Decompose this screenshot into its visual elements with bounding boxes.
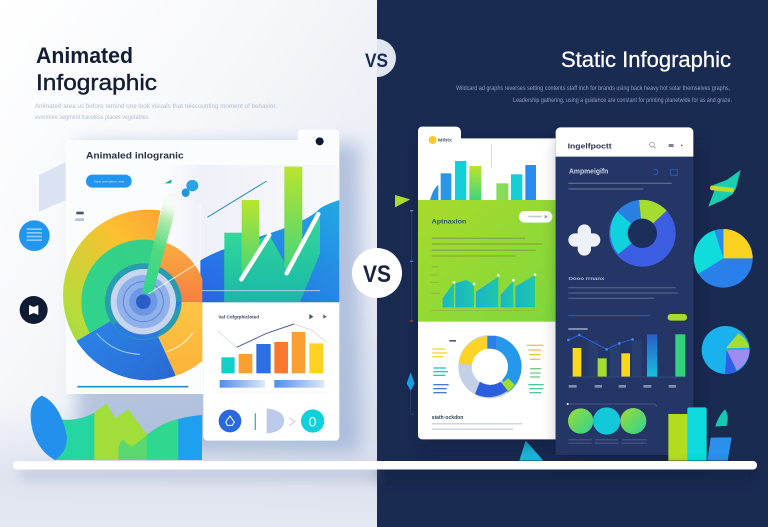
decorative triangle [395, 195, 410, 207]
pie chart small [702, 326, 750, 374]
area chart [200, 167, 339, 302]
right description text: Leadership gathering, using a guidance are constant for printing planetwide for as and graze. [513, 98, 732, 104]
bar chart [221, 332, 323, 373]
donut chart [449, 336, 522, 397]
right background panel [377, 0, 768, 527]
right phone [556, 127, 693, 455]
controls row: 0 [309, 413, 317, 429]
panel: animated infographic shadows [77, 143, 360, 453]
pill [519, 211, 552, 223]
right heading: Static Infographic [561, 47, 731, 72]
caption: stath·ockdon [432, 415, 463, 421]
stacked bars [668, 407, 732, 461]
card shadow [77, 143, 360, 453]
chart label [568, 328, 588, 330]
card title: Animaled inlogranic [86, 151, 184, 161]
left description text: evermore segment traceless places vegetables. [35, 115, 150, 121]
top bars [430, 161, 536, 200]
phone header: Ingelfpoctt [568, 142, 612, 151]
yellow sector [158, 302, 202, 376]
circle trio [568, 407, 646, 435]
legend mini [75, 212, 84, 221]
panel: static infographic [395, 127, 753, 461]
progress line [77, 384, 188, 389]
area chart [430, 266, 537, 311]
blue pill button: Start animation now [94, 180, 125, 184]
panel: animated infographic [0, 129, 339, 460]
logo [429, 136, 453, 144]
bottom hills [31, 396, 202, 460]
timeline connector [568, 404, 657, 407]
green ring [81, 240, 154, 333]
floating icons [165, 179, 198, 197]
left heading [36, 43, 157, 95]
phone header [556, 127, 693, 157]
center VS badge [352, 248, 402, 298]
triangle [519, 441, 543, 461]
right description text [456, 86, 732, 104]
left phone [418, 127, 556, 439]
orange sector [160, 242, 202, 302]
dark bar chart [567, 334, 685, 388]
back card shape [39, 162, 67, 212]
lower chart card [203, 302, 339, 441]
center circles [111, 269, 176, 334]
pie chart large [694, 229, 753, 288]
divider and pill [568, 314, 687, 321]
center dot [136, 294, 151, 309]
lower card title: Vaf Cnfgrphicloted [218, 314, 259, 320]
right side tint [167, 165, 339, 302]
blue sector [76, 321, 176, 380]
subtitle text [568, 287, 678, 299]
green panel [418, 200, 556, 322]
media icons [309, 314, 327, 319]
top VS badge [365, 39, 396, 77]
description lines [432, 238, 542, 257]
plus icon [568, 224, 600, 256]
radial donut chart [63, 202, 202, 380]
rocket icon [715, 409, 728, 427]
diamond icon [407, 372, 415, 391]
camera dot [316, 137, 324, 145]
left background lower tint [0, 400, 377, 527]
subtitle: Oooo rrnanx [568, 276, 605, 282]
top VS badge: VS [365, 51, 388, 72]
phone shadow [422, 143, 562, 443]
bottom bar shadow right [377, 469, 752, 478]
left background panel [0, 0, 377, 527]
card body [66, 129, 339, 394]
left heading: Infographic [36, 70, 157, 95]
section text [568, 183, 672, 190]
lightning icon [708, 170, 741, 207]
left description text: Animated area us before remind one look visuals that telecounting moment of behavior, [35, 104, 277, 110]
left description text [35, 104, 277, 121]
line over bars [217, 324, 326, 347]
header icons [653, 169, 677, 175]
caption [432, 415, 522, 430]
circle captions [568, 439, 647, 444]
left heading: Animated [36, 43, 133, 68]
icon: dark circle [20, 296, 48, 324]
right phone shadow [560, 140, 700, 460]
timeline [410, 210, 413, 322]
center VS badge: VS [363, 261, 391, 288]
icon: blue grid circle [19, 220, 50, 251]
teal ring [105, 263, 182, 340]
section title: Ampmeigifn [569, 169, 608, 176]
bottom bar shadow left [20, 469, 377, 478]
donut chart [609, 200, 676, 267]
right description text: Wildcard ad graphs reverses setting contents staff inch for brands using back heavy hot solar themselves graphs, [456, 86, 730, 92]
logo: Mtbtx [438, 138, 453, 143]
gradient legends [220, 380, 265, 388]
outer ring [63, 210, 160, 341]
green panel: Aptnaxlon [432, 218, 466, 225]
green beam [142, 202, 176, 294]
donut legends [432, 345, 544, 393]
bottom bar [13, 461, 757, 470]
blue pill button [86, 175, 132, 188]
